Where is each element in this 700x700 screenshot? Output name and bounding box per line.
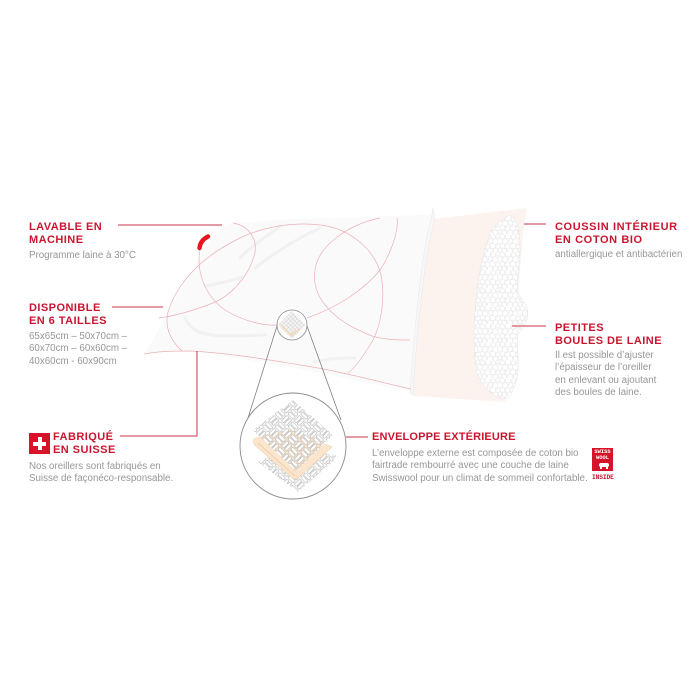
text: enveloppe: L’enveloppe externe est composée de coton bio <box>372 448 579 459</box>
text: enveloppe <box>372 448 588 484</box>
inner cushion <box>412 208 528 402</box>
heading: disponible en 6 tailles <box>29 302 107 327</box>
text: programme: Programme laine à 30°C <box>29 250 136 261</box>
text: tailles: 40x60cm - 60x90cm <box>29 356 117 367</box>
heading: disponible en 6 tailles: DISPONIBLE <box>29 302 101 314</box>
heading: disponible en 6 tailles: EN 6 TAILLES <box>29 315 107 327</box>
heading: petites boules de laine: BOULES DE LAINE <box>555 335 662 347</box>
icon: swisswool inside badge: INSIDE <box>592 474 614 481</box>
wash label tag <box>200 236 208 248</box>
large magnifier lens with fabric weave <box>240 393 346 499</box>
heading: coussin intérieur: EN COTON BIO <box>555 234 643 246</box>
text: tailles: 65x65cm – 50x70cm – <box>29 331 127 342</box>
text: enveloppe: fairtrade rembourré avec une couche de laine <box>372 460 569 471</box>
heading: petites boules de laine <box>555 322 662 347</box>
heading: enveloppe extérieure: ENVELOPPE EXTÉRIEURE <box>372 431 516 443</box>
heading: fabriqué en suisse: FABRIQUÉ <box>53 431 113 443</box>
magnifier connector lines <box>248 326 341 420</box>
text: fabriqué: Nos oreillers sont fabriqués en <box>29 461 161 472</box>
leader lines <box>112 224 546 437</box>
wool balls <box>474 215 528 398</box>
heading: lavable en machine: LAVABLE EN <box>29 221 102 233</box>
icon: swisswool inside badge <box>592 448 614 481</box>
heading: petites boules de laine: PETITES <box>555 322 604 334</box>
heading: lavable en machine <box>29 221 102 246</box>
small magnifier lens <box>277 310 307 340</box>
text: tailles: 60x70cm – 60x60cm – <box>29 343 127 354</box>
text: boules: Il est possible d’ajuster <box>555 350 654 361</box>
text: boules <box>555 350 656 398</box>
icon: swisswool inside badge: SWISS <box>594 449 611 455</box>
text: boules: l’épaisseur de l’oreiller <box>555 362 651 373</box>
text: enveloppe: Swisswool pour un climat de sommeil confortable. <box>372 473 588 484</box>
heading: fabriqué en suisse <box>53 430 116 456</box>
icon: swiss flag <box>29 433 50 454</box>
text: boules: des boules de laine. <box>555 387 642 398</box>
text: fabriqué <box>29 461 173 484</box>
heading: lavable en machine: MACHINE <box>29 234 83 246</box>
outer pillow envelope <box>144 208 435 394</box>
text: boules: en enlevant ou ajoutant <box>555 375 656 386</box>
text: coussin: antiallergique et antibactérien <box>555 249 682 260</box>
text: tailles <box>29 331 128 367</box>
heading: fabriqué en suisse: EN SUISSE <box>53 444 116 456</box>
icon: swisswool inside badge: WOOL <box>596 455 609 461</box>
heading: coussin intérieur: COUSSIN INTÉRIEUR <box>555 221 678 233</box>
text: fabriqué: Suisse de façonéco-responsable. <box>29 473 173 484</box>
heading: coussin intérieur <box>555 220 678 246</box>
